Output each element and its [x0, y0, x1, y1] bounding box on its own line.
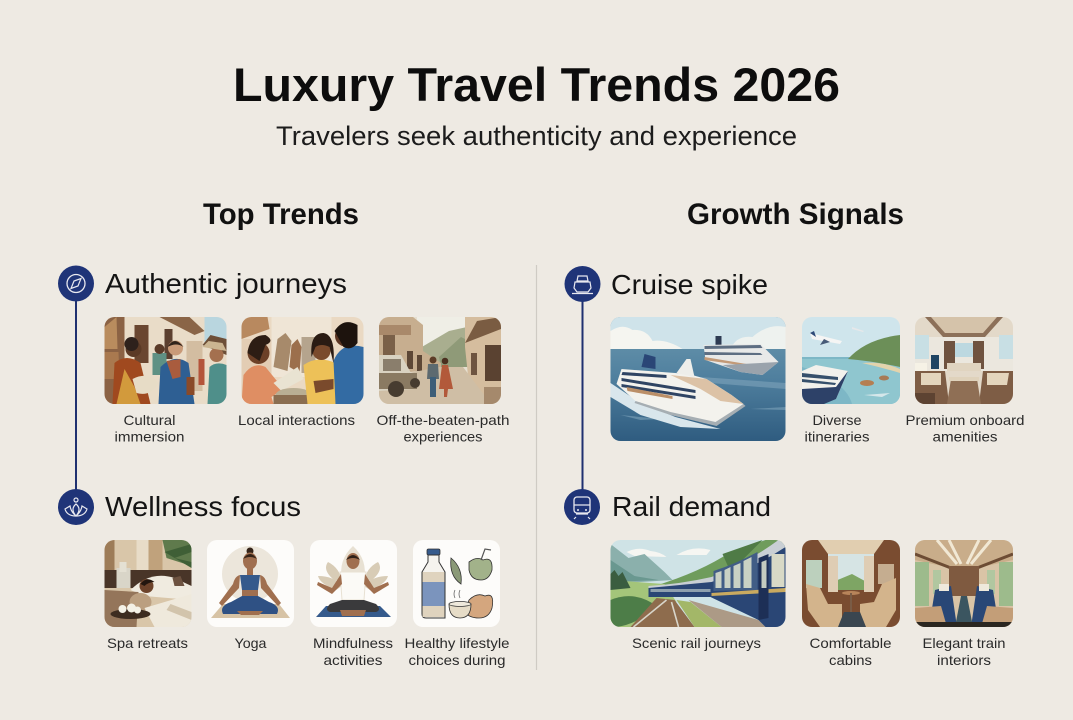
near ship: [610, 354, 746, 429]
caption: Local interactions: Local interactions: [238, 412, 355, 428]
caption: Off-the-beaten-path experiences: experiences: [404, 428, 482, 444]
caption: Diverse itineraries: [804, 412, 870, 444]
caption: Elegant train interiors: [922, 635, 1006, 668]
distant ship: [704, 336, 778, 375]
caption: Elegant train interiors: Elegant train: [922, 635, 1006, 651]
subtitle: Travelers seek authenticity and experience: [276, 121, 797, 151]
caption: Diverse itineraries: itineraries: [804, 428, 870, 444]
panel: Growth Signals timeline: [564, 266, 1024, 668]
caption: Off-the-beaten-path experiences: Off-the-beaten-path: [376, 412, 510, 428]
image: elegant train interiors: [915, 540, 1013, 627]
caption: Mindfulness activities: [313, 635, 393, 668]
image: comfortable cabins: [802, 540, 900, 627]
connector line: Top Trends: [75, 300, 77, 492]
caption: Premium onboard amenities: Premium onboard: [906, 412, 1024, 428]
image: mindfulness: [310, 540, 397, 627]
caption: Spa retreats: Spa retreats: [107, 635, 188, 651]
caption: Premium onboard amenities: amenities: [932, 428, 998, 444]
caption: Mindfulness activities: Mindfulness: [313, 635, 393, 651]
heading: Growth Signals: Growth Signals: [687, 198, 904, 231]
image: local interactions: [242, 317, 364, 404]
caption: Elegant train interiors: interiors: [937, 652, 991, 668]
connector line: Growth Signals: [582, 300, 584, 492]
caption: Cultural immersion: Cultural: [124, 412, 176, 428]
image: diverse itineraries: [802, 317, 900, 404]
track: [630, 598, 694, 627]
heading: Wellness focus: Wellness focus: [105, 491, 301, 522]
caption: Yoga: Yoga: [234, 635, 267, 651]
image: healthy lifestyle: [413, 540, 500, 627]
icon: lotus: [58, 489, 94, 525]
caption: Scenic rail journeys: Scenic rail journeys: [632, 635, 761, 651]
icon: compass: [58, 266, 94, 302]
caption: Off-the-beaten-path experiences: [376, 412, 510, 444]
image: premium onboard amenities: [915, 317, 1013, 404]
panel: Top Trends timeline: [58, 266, 510, 668]
caption: Mindfulness activities: activities: [324, 652, 382, 668]
caption: Cultural immersion: immersion: [114, 428, 184, 444]
icon: train: [564, 489, 600, 525]
caption: Cultural immersion: [114, 412, 184, 444]
caption: Comfortable cabins: Comfortable: [810, 635, 892, 651]
caption: Healthy lifestyle choices during: Healthy lifestyle: [404, 635, 510, 651]
icon: ship: [564, 266, 600, 302]
image: two cruise ships: [610, 317, 786, 441]
heading: Cruise spike: Cruise spike: [611, 269, 768, 300]
image: yoga: [207, 540, 294, 627]
title: Luxury Travel Trends 2026: [233, 58, 840, 111]
caption: Comfortable cabins: [810, 635, 892, 668]
image: cultural immersion: [104, 317, 226, 404]
image: spa retreats: [104, 540, 192, 627]
caption: Healthy lifestyle choices during: [404, 635, 510, 668]
caption: Healthy lifestyle choices during: choices during: [408, 652, 506, 668]
caption: Diverse itineraries: Diverse: [812, 412, 862, 428]
image: scenic rail journeys: [610, 540, 786, 627]
train: [648, 544, 786, 627]
heading: Authentic journeys: Authentic journeys: [105, 268, 347, 299]
heading: Top Trends: Top Trends: [203, 198, 359, 231]
heading: Rail demand: Rail demand: [612, 491, 771, 522]
caption: Comfortable cabins: cabins: [829, 652, 872, 668]
caption: Premium onboard amenities: [906, 412, 1024, 444]
image: off-the-beaten-path: [379, 317, 501, 404]
